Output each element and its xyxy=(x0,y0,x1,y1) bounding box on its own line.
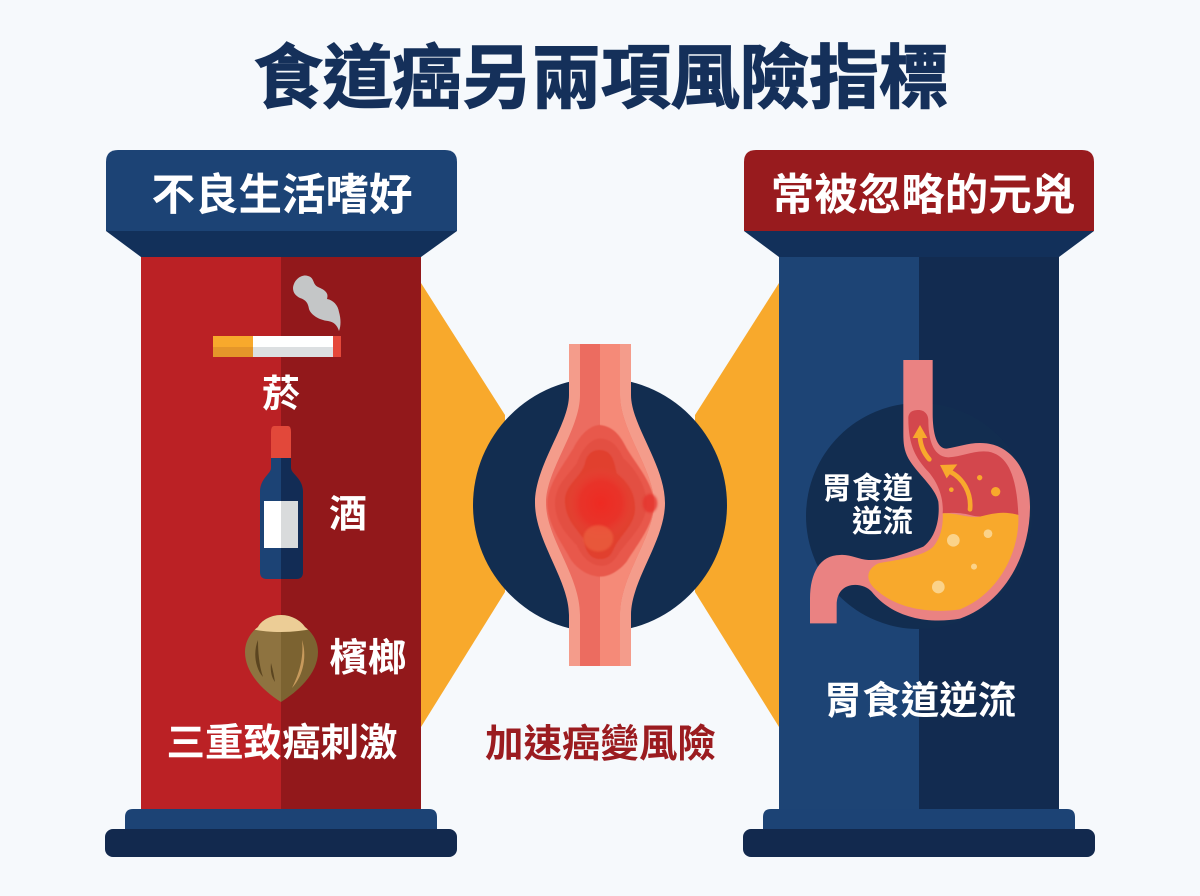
pillar capital xyxy=(106,231,457,257)
pillar capital xyxy=(744,231,1094,257)
panel: left pillar lifestyle habits xyxy=(105,150,457,857)
icon: stomach with acid reflux xyxy=(810,360,1030,623)
pillar base xyxy=(105,809,457,857)
right header xyxy=(744,150,1094,231)
pillar shaft left xyxy=(141,257,421,809)
left header: 不良生活嗜好 xyxy=(152,172,412,220)
red gastric chamber xyxy=(908,410,1018,516)
panel: right pillar overlooked culprit xyxy=(743,150,1095,857)
inset label: reflux xyxy=(822,472,913,539)
caption: gastroesophageal reflux: 胃食道逆流 xyxy=(824,680,1016,723)
right header: 常被忽略的元兇 xyxy=(771,172,1075,220)
icon: betel nut xyxy=(245,610,318,702)
label: alcohol: 酒 xyxy=(329,494,367,536)
connector: left yellow funnel xyxy=(421,283,505,727)
bubbles xyxy=(932,475,1000,593)
stomach wall xyxy=(810,360,1030,623)
panel: center esophagus lesion xyxy=(473,344,727,666)
icon: smoke xyxy=(293,276,340,331)
pillar shaft right xyxy=(779,257,1059,809)
icon: wine bottle xyxy=(260,426,303,579)
icon: cigarette xyxy=(213,336,341,357)
yellow acid pool xyxy=(868,513,1018,611)
caption: accelerated cancer risk: 加速癌變風險 xyxy=(485,723,716,766)
caption: triple carcinogenic stimulus: 三重致癌刺激 xyxy=(166,722,398,765)
pillar base xyxy=(743,809,1095,857)
arrowheads xyxy=(913,425,957,478)
title: 食道癌另兩項風險指標 xyxy=(254,39,948,117)
label: smoke: 菸 xyxy=(262,374,300,416)
connector: right yellow funnel xyxy=(695,283,779,727)
dark circle behind stomach xyxy=(806,403,1032,629)
lesion xyxy=(547,425,657,577)
arrow: reflux small xyxy=(920,437,970,509)
left header xyxy=(106,150,457,231)
inset label: reflux: 逆流 xyxy=(852,505,913,539)
esophagus tube xyxy=(530,344,670,666)
dark circle xyxy=(473,378,727,632)
label: betel nut: 檳榔 xyxy=(329,637,407,680)
inset label: reflux: 胃食道 xyxy=(822,472,913,506)
